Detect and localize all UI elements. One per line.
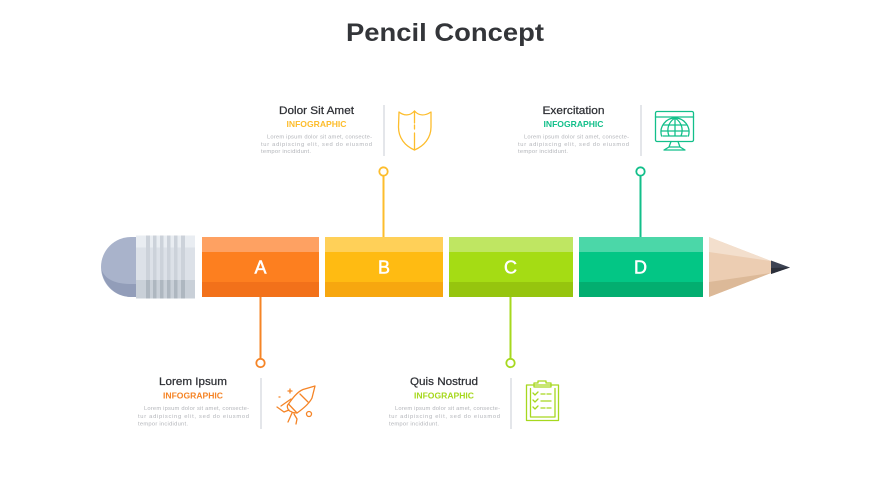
connector: C [506,297,515,367]
title: Pencil Concept [346,19,545,47]
icon: globe monitor [656,112,694,150]
segment D: D [634,258,647,278]
subheading: INFOGRAPHIC [163,392,223,400]
body text: tur adipiscing elit, sed do eiusmod [389,414,500,420]
segment A: A [254,258,267,278]
body text: Lorem ipsum dolor sit amet, consecte- [267,134,372,140]
body text: tempor incididunt. [138,422,188,428]
body text: tempor incididunt. [389,422,439,428]
heading: Quis Nostrud [410,376,478,388]
icon: rocket [277,386,315,424]
segment C [449,237,573,297]
divider [260,378,262,429]
connector: B [379,167,388,237]
subheading: INFOGRAPHIC [544,120,604,129]
pencil tip [709,237,790,297]
callout: C [389,376,558,429]
body text: Lorem ipsum dolor sit amet, consecte- [144,406,249,412]
body text: Lorem ipsum dolor sit amet, consecte- [395,406,500,412]
eraser [101,237,136,297]
body text [518,134,629,155]
body text [389,406,500,428]
callout: B [261,105,431,156]
segment B: B [378,258,390,278]
body text: tur adipiscing elit, sed do eiusmod [138,414,249,420]
body text: Lorem ipsum dolor sit amet, consecte- [524,134,629,140]
body text: tur adipiscing elit, sed do eiusmod [261,142,372,148]
segment A [202,237,319,297]
subheading: INFOGRAPHIC [286,120,347,129]
segment C: C [504,258,517,278]
icon: shield [398,111,431,150]
pencil [101,236,790,298]
body text: tempor incididunt. [261,149,311,155]
connector: D [636,167,645,237]
body text: tur adipiscing elit, sed do eiusmod [518,142,629,148]
heading: Exercitation [542,105,604,117]
connector: A [256,297,265,367]
ferrule [136,236,195,298]
segment B [325,237,443,297]
segment D [579,237,703,297]
heading: Lorem Ipsum [159,376,227,388]
callout: D [518,105,694,156]
divider [510,378,512,429]
body text [138,406,249,428]
divider [640,105,642,156]
body text: tempor incididunt. [518,149,568,155]
icon: clipboard [526,381,558,420]
divider [383,105,385,156]
heading: Dolor Sit Amet [279,105,354,117]
subheading: INFOGRAPHIC [414,392,474,400]
body text [261,134,372,155]
callout: A [138,376,315,429]
